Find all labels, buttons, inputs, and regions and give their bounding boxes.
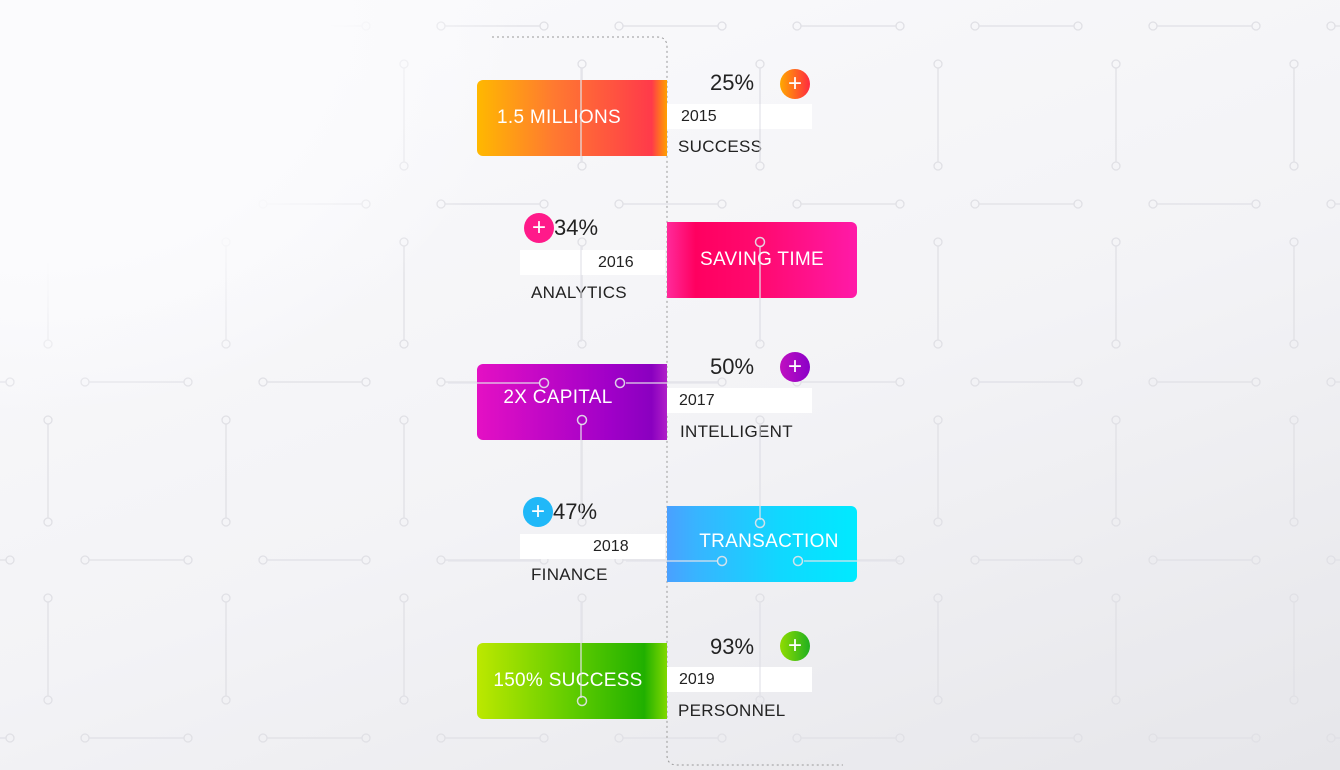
- box: 2x capital: [477, 364, 667, 440]
- box: 150% success: [477, 643, 667, 719]
- plus icon: +: [532, 214, 546, 241]
- box: 1.5 millions: 1.5 MILLIONS: [497, 107, 621, 128]
- year 2018: [520, 534, 665, 559]
- box: saving time: [667, 222, 857, 298]
- row 2016: [520, 213, 857, 302]
- plus icon: +: [531, 498, 545, 525]
- year 2015: 2015: [681, 108, 717, 125]
- box: saving time: SAVING TIME: [700, 249, 824, 270]
- year 2018: 2018: [593, 538, 629, 555]
- percent 34%: 34%: [554, 215, 598, 240]
- year 2015: [667, 104, 812, 129]
- plus icon: [780, 352, 810, 382]
- row 2018: [520, 497, 857, 584]
- year 2019: [667, 667, 812, 692]
- plus icon: [523, 497, 553, 527]
- year 2016: [520, 250, 665, 275]
- year 2017: 2017: [679, 392, 715, 409]
- year 2017: [667, 388, 812, 413]
- year 2016: 2016: [598, 254, 634, 271]
- percent 47%: 47%: [553, 499, 597, 524]
- label personnel: PERSONNEL: [678, 701, 786, 720]
- year 2019: 2019: [679, 671, 715, 688]
- plus icon: +: [788, 353, 802, 380]
- box: 2x capital: 2X CAPITAL: [503, 387, 613, 408]
- plus icon: +: [788, 632, 802, 659]
- row 2015: [477, 69, 812, 156]
- box: transaction: [667, 506, 857, 582]
- plus icon: [780, 69, 810, 99]
- percent 25%: 25%: [710, 70, 754, 95]
- row 2019: [477, 631, 812, 720]
- box: 1.5 millions: [477, 80, 667, 156]
- label analytics: ANALYTICS: [531, 283, 627, 302]
- row 2017: [477, 352, 812, 441]
- label intelligent: INTELLIGENT: [680, 422, 793, 441]
- box: 150% success: 150% SUCCESS: [493, 670, 643, 691]
- plus icon: [524, 213, 554, 243]
- percent 50%: 50%: [710, 354, 754, 379]
- plus icon: [780, 631, 810, 661]
- label success: SUCCESS: [678, 137, 762, 156]
- box: transaction: TRANSACTION: [699, 531, 839, 552]
- label finance: FINANCE: [531, 565, 608, 584]
- plus icon: +: [788, 70, 802, 97]
- percent 93%: 93%: [710, 634, 754, 659]
